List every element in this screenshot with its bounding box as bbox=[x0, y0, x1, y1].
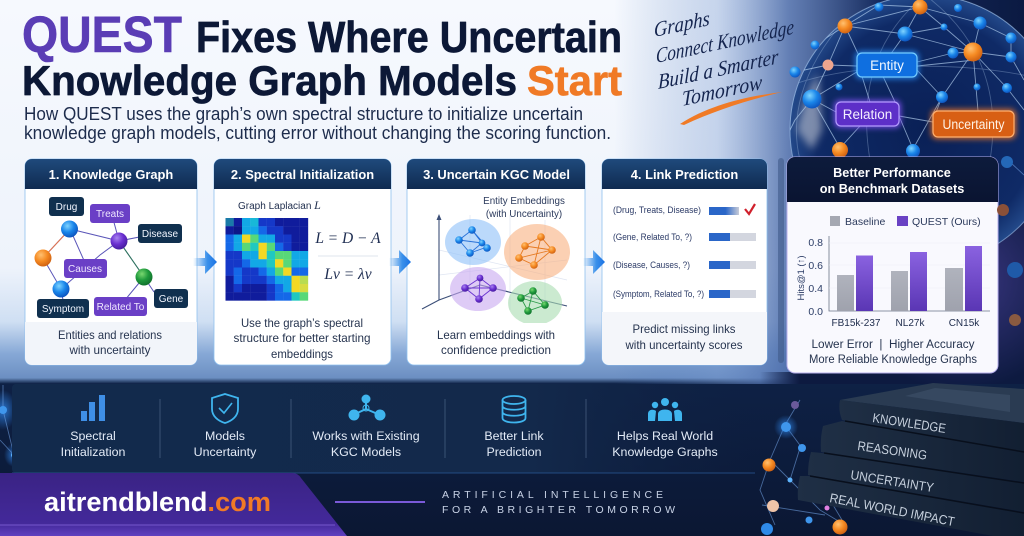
arrow: spectral to KGC model bbox=[389, 250, 411, 274]
panel: link prediction bbox=[602, 159, 767, 365]
benefit: helps real world knowledge graphs: Knowledge Graphs bbox=[612, 445, 718, 459]
benefit: spectral initialization: Spectral bbox=[70, 429, 116, 443]
tag: uncertainty bbox=[931, 109, 1016, 139]
panel: uncertain KGC model: 3. Uncertain KGC Model bbox=[423, 167, 570, 182]
panel: uncertain KGC model bbox=[407, 159, 585, 365]
subtitle bbox=[24, 104, 611, 143]
tag: relation: Relation bbox=[843, 107, 892, 122]
arrow: KGC model to link prediction bbox=[583, 250, 605, 274]
benefit: works with existing KGC models: KGC Models bbox=[331, 445, 401, 459]
bar chart: hits at 1: 0.4 bbox=[808, 283, 823, 295]
prediction rows with confidence bars bbox=[613, 204, 756, 299]
panel: uncertain KGC model: Entity Embeddings bbox=[483, 196, 565, 207]
panel: spectral initialization: 2. Spectral Initialization bbox=[231, 167, 374, 182]
panel: spectral initialization bbox=[214, 159, 391, 365]
bar chart: hits at 1 bbox=[796, 236, 990, 329]
panel: spectral initialization: embeddings bbox=[271, 347, 333, 361]
graph entity and relation labels: Gene bbox=[159, 294, 184, 305]
3D embedding plot bbox=[422, 214, 570, 325]
benefit: spectral initialization: Initialization bbox=[61, 445, 125, 459]
book stack: REASONING bbox=[857, 438, 928, 463]
graph entity and relation labels: Causes bbox=[68, 264, 102, 275]
graph edges and nodes bbox=[34, 215, 160, 300]
footer brand band bbox=[0, 473, 347, 536]
formulas bbox=[314, 230, 381, 283]
panel: knowledge graph: Entities and relations bbox=[58, 328, 162, 342]
panel: knowledge graph bbox=[25, 159, 197, 365]
panel: uncertain KGC model: confidence prediction bbox=[441, 343, 551, 357]
book stack bbox=[798, 383, 1024, 536]
benefit: helps real world knowledge graphs: Helps Real World bbox=[617, 429, 713, 443]
benefit: spectral initialization bbox=[61, 395, 125, 459]
panel: link prediction: Predict missing links bbox=[632, 322, 736, 336]
formulas: L = D − A bbox=[314, 230, 381, 247]
panel: link prediction: 4. Link Prediction bbox=[631, 167, 738, 182]
panel: link prediction: with uncertainty scores bbox=[625, 338, 742, 352]
footer tagline: ARTIFICIAL INTELLIGENCE bbox=[442, 489, 663, 501]
footer brand band: aitrendblend.com bbox=[44, 487, 271, 517]
graph entity and relation labels: Disease bbox=[142, 229, 178, 240]
handwritten slogan bbox=[654, 6, 794, 125]
benefit: models uncertainty: Models bbox=[205, 429, 245, 443]
panel: spectral initialization: Graph Laplacian L bbox=[238, 198, 321, 212]
benefit: works with existing KGC models: Works with Existing bbox=[312, 429, 420, 443]
chart legend: QUEST (Ours) bbox=[912, 216, 981, 228]
panel: spectral initialization: structure for better starting bbox=[234, 331, 370, 345]
graph entity and relation labels: Related To bbox=[97, 302, 145, 313]
formulas: Lv = λv bbox=[323, 266, 372, 283]
graph entity and relation labels bbox=[37, 197, 188, 318]
benefits strip bbox=[12, 384, 757, 473]
benefit: helps real world knowledge graphs bbox=[612, 398, 718, 459]
bar chart: hits at 1: CN15k bbox=[949, 318, 980, 329]
title: Knowledge Graph Models bbox=[22, 57, 517, 104]
book stack: KNOWLEDGE bbox=[872, 410, 947, 436]
background network: left edge bbox=[0, 385, 24, 472]
prediction rows with confidence bars: (Disease, Causes, ?) bbox=[613, 260, 690, 270]
benefit: models uncertainty bbox=[194, 394, 257, 459]
bar chart: hits at 1: Hits@1 (↑) bbox=[796, 255, 807, 301]
chart legend: Baseline bbox=[845, 216, 885, 228]
tag: entity bbox=[855, 51, 919, 79]
graph entity and relation labels: Treats bbox=[96, 209, 124, 220]
benefit: better link prediction bbox=[484, 396, 544, 459]
book stack: REAL WORLD IMPACT bbox=[828, 490, 956, 529]
handwritten slogan: Connect Knowledge bbox=[656, 14, 794, 68]
title: QUEST bbox=[22, 6, 182, 63]
tag: entity: Entity bbox=[870, 58, 904, 73]
book stack: UNCERTAINTY bbox=[850, 467, 935, 495]
panel: benchmark performance: Better Performance bbox=[833, 166, 951, 180]
prediction rows with confidence bars: (Symptom, Related To, ?) bbox=[613, 289, 704, 299]
panel: benchmark performance: More Reliable Knowledge Graphs bbox=[809, 354, 977, 366]
bar chart: hits at 1: 0.0 bbox=[808, 306, 823, 318]
handwritten slogan: Tomorrow bbox=[682, 70, 762, 111]
benefit: better link prediction: Better Link bbox=[484, 429, 544, 443]
graph entity and relation labels: Drug bbox=[56, 202, 77, 213]
footer tagline: FOR A BRIGHTER TOMORROW bbox=[442, 504, 675, 516]
handwritten slogan: Graphs bbox=[654, 6, 710, 42]
handwritten slogan: Build a Smarter bbox=[658, 44, 779, 94]
bar chart: hits at 1: 0.8 bbox=[808, 237, 823, 249]
benefit: models uncertainty: Uncertainty bbox=[194, 445, 257, 459]
subtitle: knowledge graph models, cutting error without changing the scoring function. bbox=[24, 123, 611, 143]
arrow: knowledge graph to spectral bbox=[193, 250, 217, 274]
panel: uncertain KGC model: (with Uncertainty) bbox=[486, 209, 562, 220]
bar chart: hits at 1: NL27k bbox=[896, 318, 925, 329]
subtitle: How QUEST uses the graph’s own spectral structure to initialize uncertain bbox=[24, 104, 583, 124]
panel: knowledge graph: with uncertainty bbox=[69, 343, 150, 357]
panel: benchmark performance bbox=[787, 157, 998, 373]
tag: uncertainty: Uncertainty bbox=[942, 117, 1005, 132]
chart legend bbox=[830, 216, 981, 228]
title bbox=[22, 6, 622, 104]
panel: benchmark performance: Lower Error | Higher Accuracy bbox=[812, 339, 975, 351]
graph entity and relation labels: Symptom bbox=[42, 304, 84, 315]
panel: knowledge graph: 1. Knowledge Graph bbox=[49, 167, 173, 182]
network globe bbox=[790, 0, 1024, 244]
background network: bottom right bbox=[760, 156, 1024, 535]
prediction rows with confidence bars: (Drug, Treats, Disease) bbox=[613, 205, 701, 215]
bar chart: hits at 1: 0.6 bbox=[808, 260, 823, 272]
tag: relation bbox=[834, 100, 901, 128]
footer tagline bbox=[335, 489, 675, 516]
bar chart: hits at 1: FB15k-237 bbox=[832, 318, 881, 329]
panel: uncertain KGC model: Learn embeddings with bbox=[437, 328, 555, 342]
prediction rows with confidence bars: (Gene, Related To, ?) bbox=[613, 232, 692, 242]
panel: benchmark performance: on Benchmark Datasets bbox=[820, 182, 964, 196]
title: Start bbox=[527, 57, 622, 104]
heatmap: graph laplacian matrix bbox=[226, 218, 308, 301]
panel: spectral initialization: Use the graph’s spectral bbox=[241, 316, 363, 330]
title: Fixes Where Uncertain bbox=[196, 13, 622, 62]
benefit: better link prediction: Prediction bbox=[486, 445, 542, 459]
benefit: works with existing KGC models bbox=[312, 394, 420, 459]
